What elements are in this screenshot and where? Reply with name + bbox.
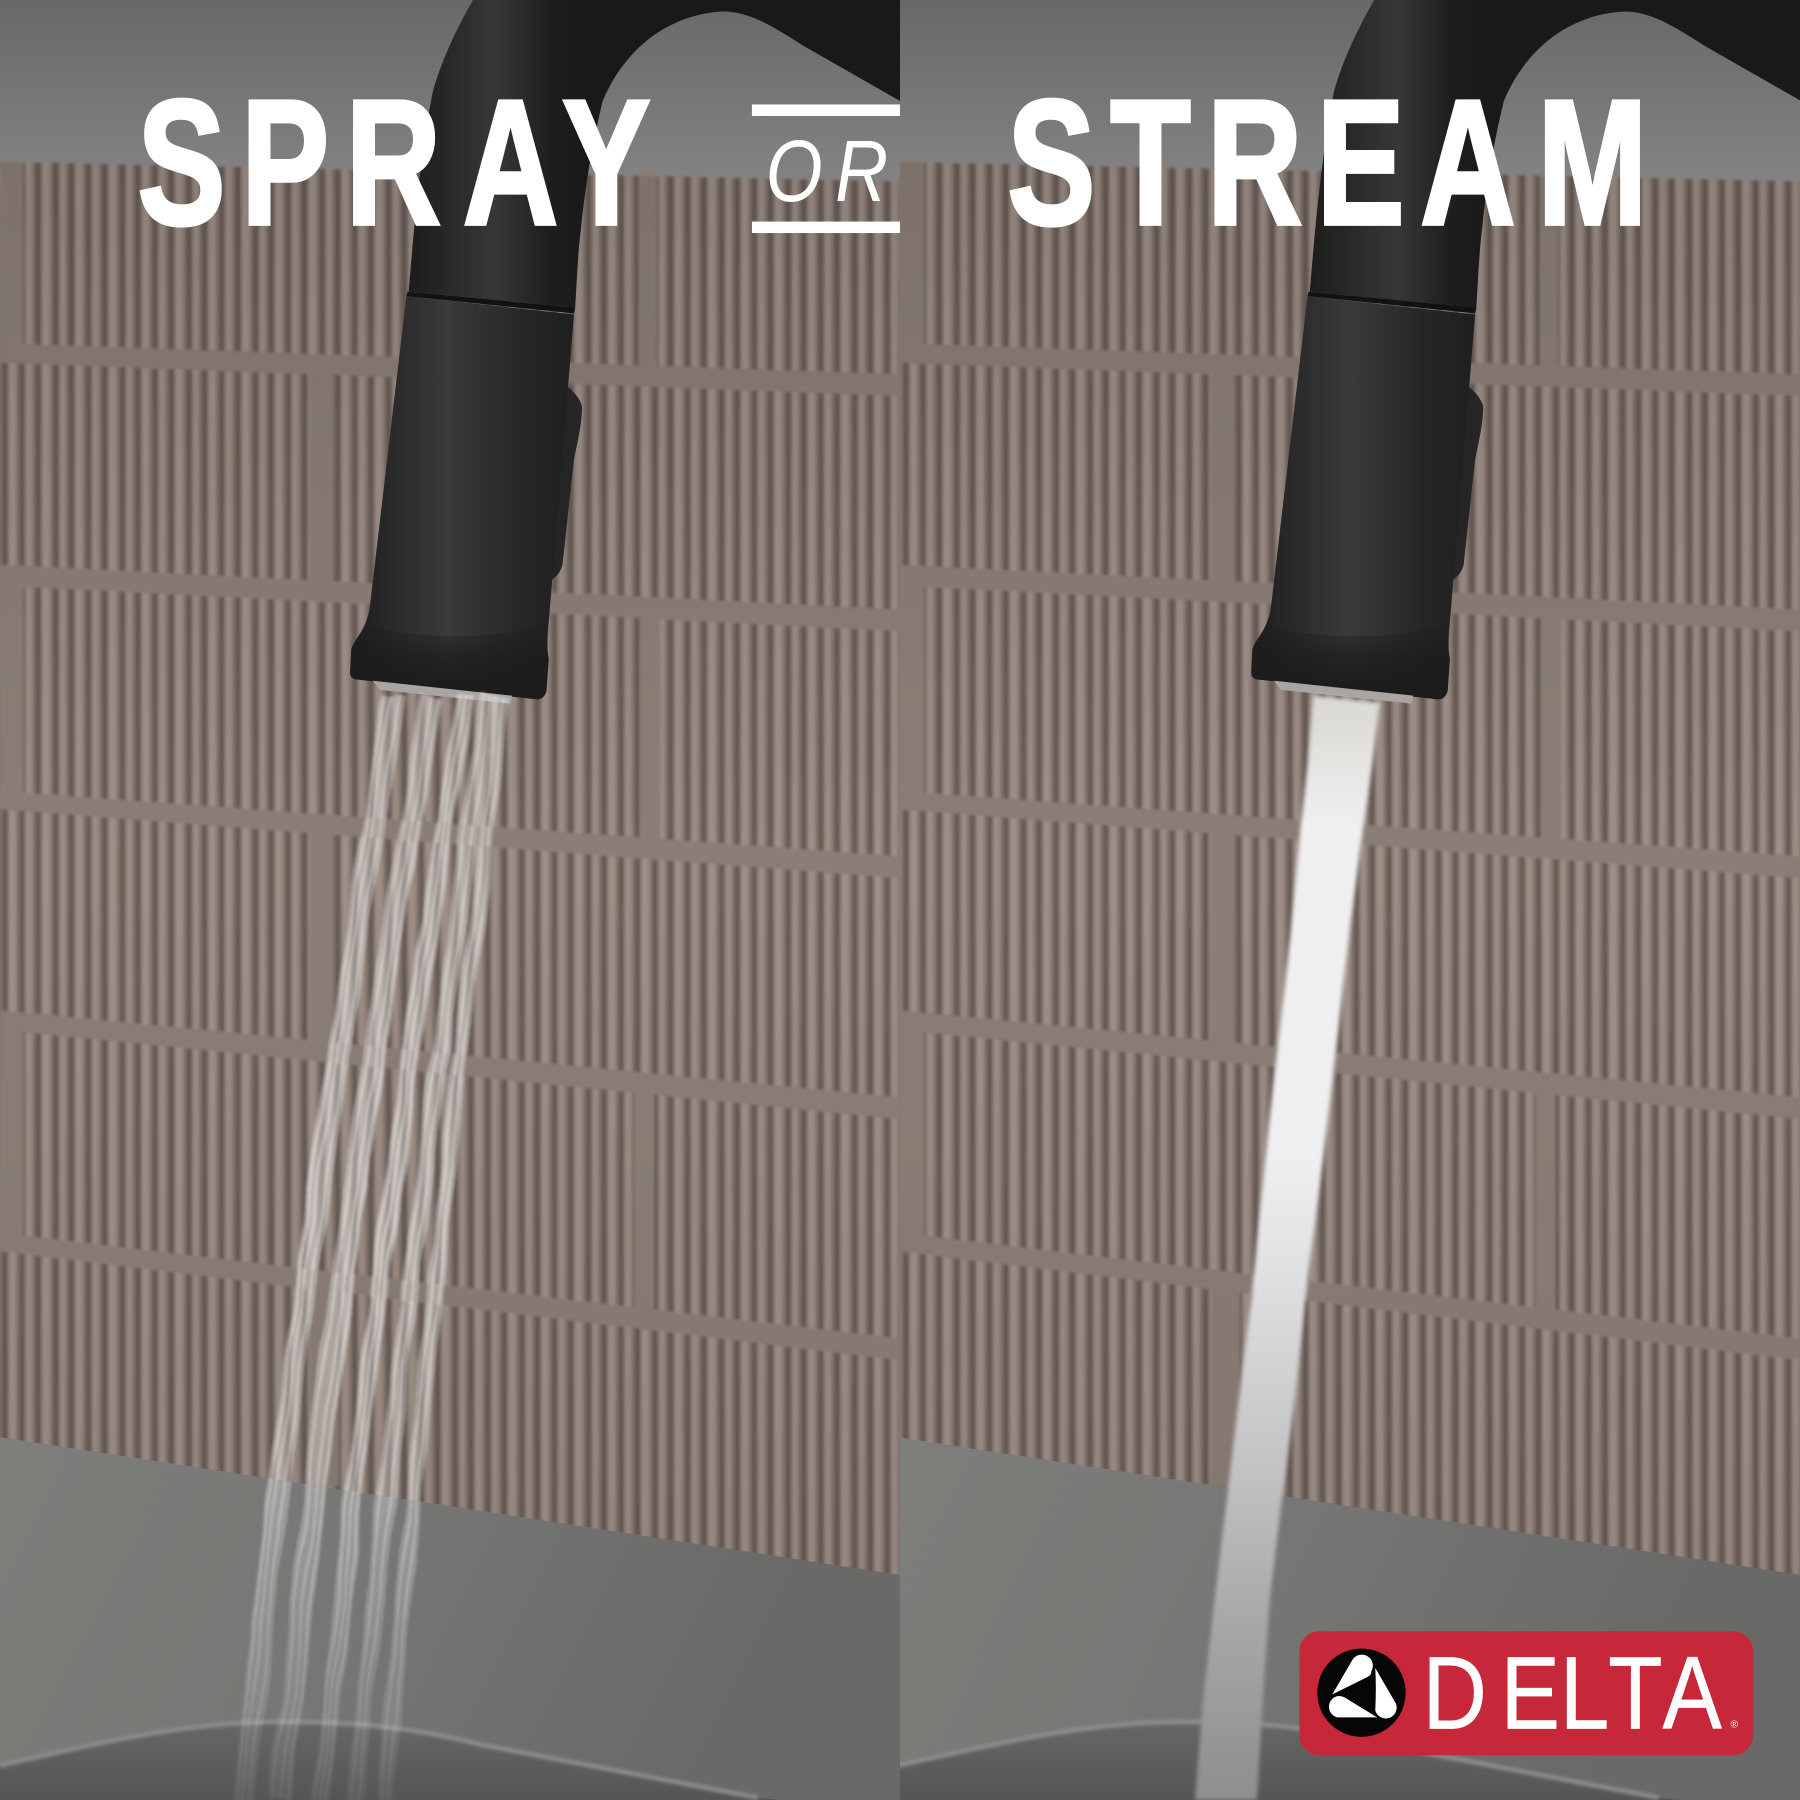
icon: faucet [1251,0,1800,704]
ribbed tile wall [0,162,900,1584]
heading: SPRAY: SPRAY [138,64,650,263]
heading: STREAM: STREAM [1007,64,1647,263]
sink basin [0,1722,781,1800]
OR text: OR [766,123,888,220]
stream water [1195,696,1380,1800]
rule top [752,104,900,116]
spray head flare shading [1251,620,1450,699]
spray button [552,387,582,580]
DELTA wordmark: DELTA [1423,1636,1722,1751]
spray button [1453,387,1484,580]
aerator [373,681,512,704]
countertop [0,1437,900,1800]
ceiling background [899,0,1800,195]
faucet neck [1310,0,1800,308]
icon: delta triangle mark [1317,1648,1406,1737]
spray head body [1251,296,1475,699]
spray head body [350,296,574,699]
spray water highlights [235,696,506,1800]
aerator [1274,681,1413,704]
logo background [1299,1631,1753,1755]
faucet collar [406,292,575,313]
icon: faucet [350,0,900,704]
ribbed tile wall [898,162,1800,1584]
faucet neck [409,0,900,308]
panel: spray [0,0,900,1800]
faucet collar [1308,292,1476,313]
registered mark: ® [1731,1720,1739,1731]
logo: Delta [1299,1631,1753,1755]
heading: OR [752,104,900,233]
rule bottom [752,222,900,233]
countertop [898,1437,1800,1800]
spray head flare shading [350,620,549,699]
panel: stream [898,0,1800,1800]
ceiling background [0,0,900,195]
sink basin [898,1722,1682,1800]
spray water [243,696,503,1800]
